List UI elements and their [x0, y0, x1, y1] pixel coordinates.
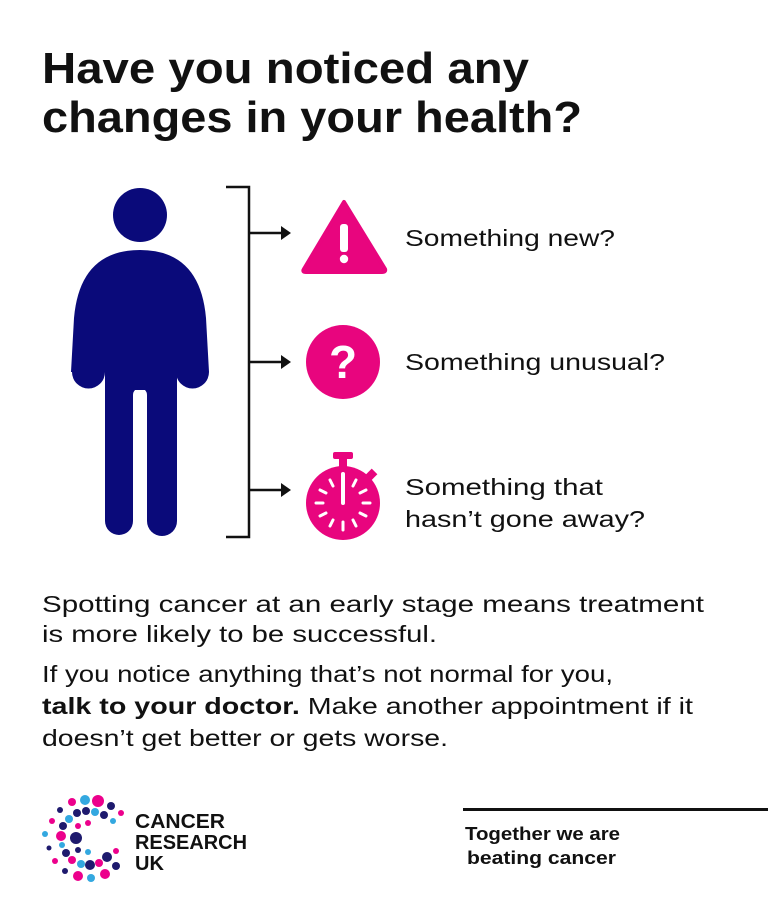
icon: question mark circle: [306, 325, 380, 399]
body text: talk to your doctor. Make another appointment if it: [42, 693, 694, 719]
logo: Cancer Research UK: [42, 795, 247, 882]
text: something that hasn't gone away: hasn’t gone away?: [405, 506, 645, 532]
text: something new: Something new?: [405, 225, 615, 251]
logo: Cancer Research UK: CANCER: [135, 811, 226, 833]
divider line: [463, 808, 768, 811]
title: [42, 44, 582, 142]
tagline: Together we are: [465, 824, 620, 844]
body text: Spotting cancer at an early stage means treatment: [42, 591, 705, 617]
tagline: beating cancer: [467, 848, 616, 868]
text: something that hasn't gone away: [405, 474, 645, 532]
body text: [42, 591, 705, 751]
bracket with arrows: [226, 187, 291, 537]
logo: Cancer Research UK: RESEARCH: [135, 832, 247, 854]
title: changes in your health?: [42, 93, 582, 142]
icon: question mark circle: ?: [329, 336, 357, 388]
body text: If you notice anything that’s not normal for you,: [42, 661, 613, 687]
text: something unusual: Something unusual?: [405, 349, 665, 375]
icon: warning triangle: [303, 202, 385, 272]
tagline: [465, 824, 620, 868]
text: something that hasn't gone away: Something that: [405, 474, 604, 500]
icon: person figure: [71, 188, 209, 536]
body text: doesn’t get better or gets worse.: [42, 725, 448, 751]
title: Have you noticed any: [42, 44, 530, 93]
logo: Cancer Research UK: UK: [135, 853, 164, 875]
body text: is more likely to be successful.: [42, 621, 437, 647]
icon: stopwatch: [306, 452, 380, 540]
